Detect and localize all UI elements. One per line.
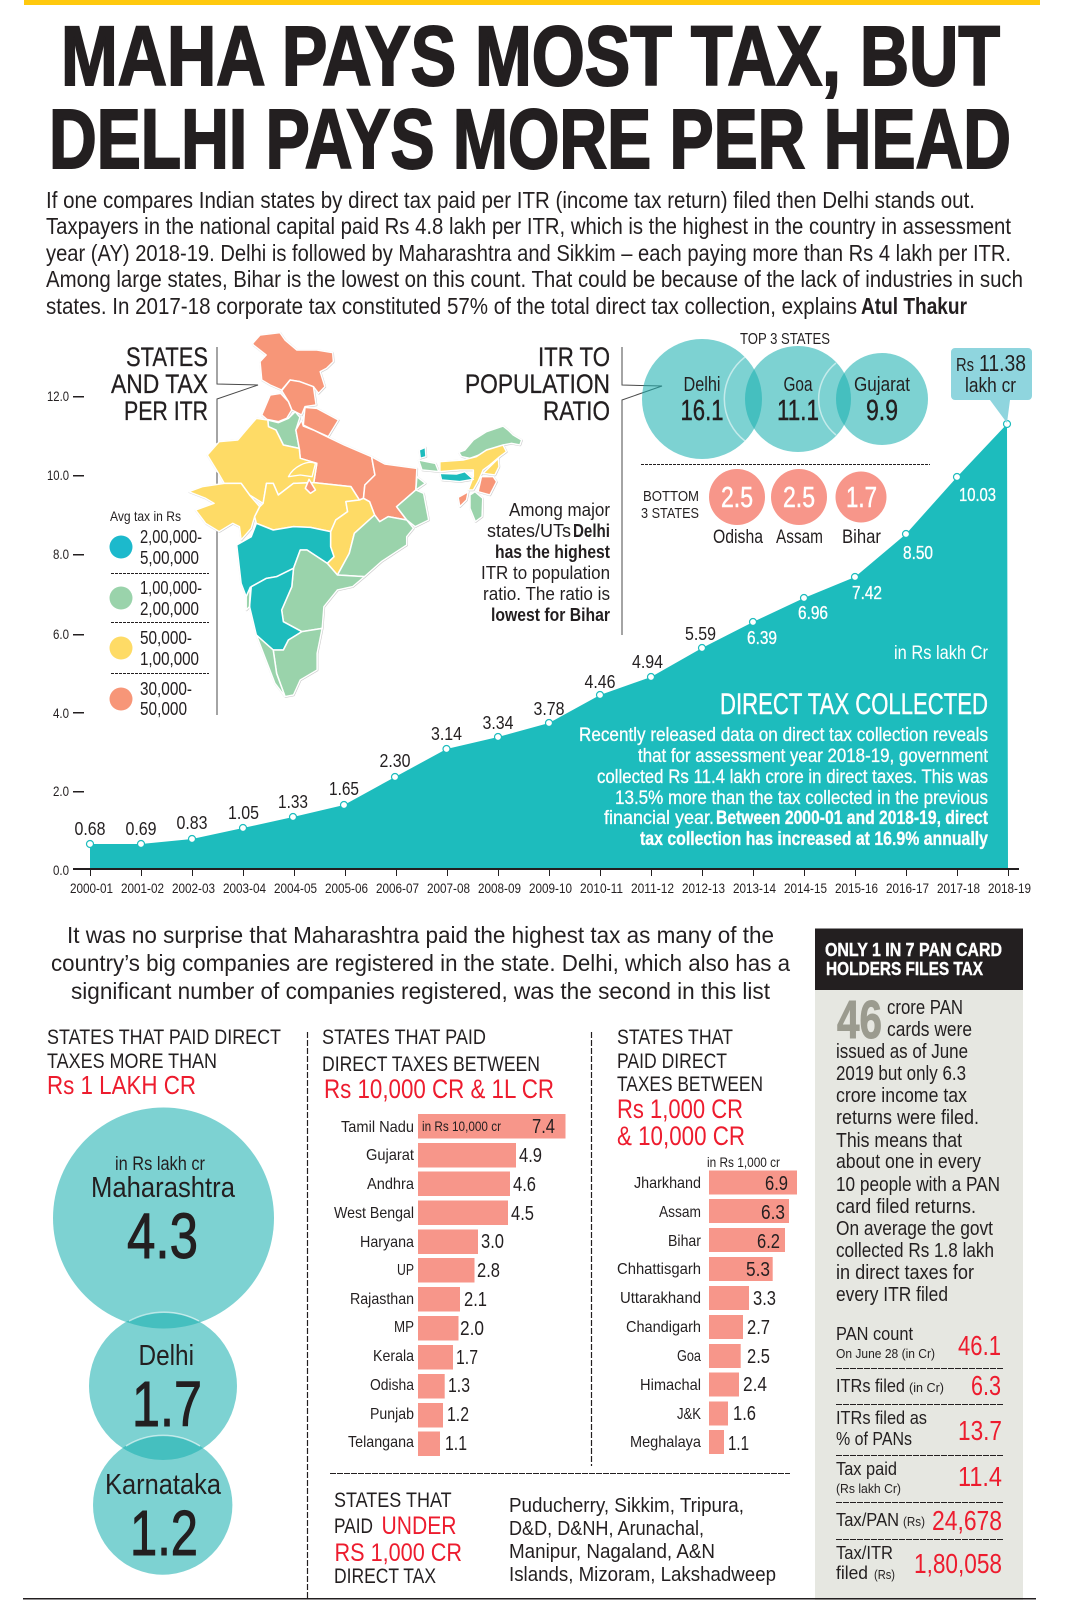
heading: 1000 cr to 10000 cr: & 10,000 CR bbox=[617, 1121, 745, 1151]
bottom 3 states circles: 2.5 bbox=[783, 482, 815, 514]
top 3 states circles: 11.1 bbox=[777, 395, 819, 427]
top 3 states circles: Delhi bbox=[684, 374, 720, 396]
x axis bbox=[70, 868, 1031, 896]
under 1000 cr block: PAID bbox=[334, 1515, 373, 1538]
x axis: 2008-09 bbox=[478, 880, 521, 896]
heading: 1000 cr to 10000 cr: STATES THAT bbox=[617, 1026, 733, 1049]
callout: Rs 11.38 lakh cr: lakh cr bbox=[965, 375, 1016, 397]
stats table: On June 28 (in Cr) bbox=[836, 1346, 935, 1361]
stats table: (Rs) bbox=[903, 1514, 925, 1529]
data value labels: 6.39 bbox=[747, 628, 777, 648]
bar chart: 10000 cr to 1 lakh cr: Andhra bbox=[367, 1176, 414, 1193]
bar chart: 1000 cr to 10000 cr: Uttarakhand bbox=[620, 1290, 701, 1307]
x axis: 2001-02 bbox=[121, 880, 164, 896]
ITR note: lowest for Bihar bbox=[491, 605, 610, 625]
ITR note: ratio. The ratio is bbox=[483, 584, 610, 604]
bar chart: 10000 cr to 1 lakh cr: 1.2 bbox=[447, 1404, 469, 1426]
bar chart: 1000 cr to 10000 cr: 5.3 bbox=[746, 1259, 770, 1281]
bar chart: 10000 cr to 1 lakh cr: Telangana bbox=[348, 1434, 414, 1451]
data point markers bbox=[86, 420, 1010, 848]
bar chart: 1000 cr to 10000 cr: 1.6 bbox=[733, 1403, 756, 1425]
intro text bbox=[46, 187, 1023, 319]
legend: avg tax: 1,00,000 bbox=[140, 649, 199, 669]
panel text: returns were filed. bbox=[836, 1107, 979, 1129]
legend: avg tax: Avg tax in Rs bbox=[110, 508, 181, 524]
bubble chart: top states bbox=[53, 1108, 274, 1575]
bar chart: 10000 cr to 1 lakh cr: 3.0 bbox=[481, 1231, 504, 1253]
panel heading: HOLDERS FILES TAX bbox=[826, 959, 983, 979]
direct tax text bbox=[579, 725, 989, 850]
x axis: 2002-03 bbox=[172, 880, 215, 896]
bar chart: 1000 cr to 10000 cr: Himachal bbox=[640, 1377, 701, 1394]
direct tax text: 13.5% more than the tax collected in the previous bbox=[615, 788, 988, 809]
under 1000 cr block: Puducherry, Sikkim, Tripura, bbox=[509, 1495, 744, 1517]
x axis: 2015-16 bbox=[835, 880, 878, 896]
heading: states and tax per ITR: STATES bbox=[126, 342, 208, 372]
unit label: in Rs lakh Cr bbox=[894, 643, 989, 664]
x axis: 2006-07 bbox=[376, 880, 419, 896]
bar chart: 1000 cr to 10000 cr: Bihar bbox=[668, 1233, 702, 1250]
heading: states and tax per ITR bbox=[111, 342, 208, 426]
bar chart: 10000 cr to 1 lakh cr: 1.3 bbox=[448, 1375, 470, 1397]
title bbox=[49, 9, 1011, 186]
under 1000 cr block: Manipur, Nagaland, A&N bbox=[509, 1541, 715, 1563]
bar chart: 10000 cr to 1 lakh cr: 1.1 bbox=[445, 1433, 467, 1455]
bar chart: 1000 cr to 10000 cr: Goa bbox=[677, 1348, 701, 1365]
stats table: 24,678 bbox=[932, 1505, 1002, 1536]
data value labels: 0.83 bbox=[176, 813, 208, 833]
bar chart: 10000 cr to 1 lakh cr: MP bbox=[394, 1319, 414, 1336]
data value labels: 4.46 bbox=[584, 672, 616, 692]
data value labels: 10.03 bbox=[959, 485, 996, 505]
y axis labels: 2.0 bbox=[53, 783, 69, 799]
panel text: in direct taxes for bbox=[836, 1262, 974, 1284]
bar chart: 1000 cr to 10000 cr: 6.9 bbox=[765, 1173, 788, 1195]
panel text: 2019 but only 6.3 bbox=[836, 1063, 966, 1085]
heading: 1000 cr to 10000 cr: PAID DIRECT bbox=[617, 1050, 727, 1073]
y axis labels: 0.0 bbox=[53, 862, 69, 878]
ITR note bbox=[481, 500, 610, 625]
intro text: Atul Thakur bbox=[861, 293, 967, 319]
data value labels: 1.65 bbox=[329, 779, 359, 799]
ITR note: ITR to population bbox=[481, 563, 610, 583]
data value labels: 5.59 bbox=[685, 624, 716, 644]
bar chart: 1000 cr to 10000 cr: 2.4 bbox=[743, 1374, 767, 1396]
x axis: 2010-11 bbox=[580, 880, 623, 896]
panel text: cards were bbox=[887, 1019, 972, 1041]
under 1000 cr block: DIRECT TAX bbox=[334, 1565, 436, 1588]
bar chart: 10000 cr to 1 lakh cr: 4.6 bbox=[513, 1174, 536, 1196]
bar chart: 1000 cr to 10000 cr: Chhattisgarh bbox=[617, 1261, 701, 1278]
heading: 10000 cr to 1 lakh cr: STATES THAT PAID bbox=[322, 1026, 486, 1049]
intro text: If one compares Indian states by direct tax paid per ITR (income tax return) filed then Delhi stands out. bbox=[46, 187, 975, 213]
stats table: Tax/PAN bbox=[836, 1510, 899, 1530]
x axis: 2017-18 bbox=[937, 880, 980, 896]
panel text: crore PAN bbox=[887, 997, 963, 1019]
bar chart: 1000 cr to 10000 cr: 1.1 bbox=[728, 1433, 749, 1455]
heading: ITR to population ratio: ITR TO bbox=[538, 342, 610, 372]
bubble chart: top states: 1.7 bbox=[132, 1368, 202, 1440]
stats table: ITRs filed bbox=[836, 1376, 905, 1396]
top 3 states circles: 16.1 bbox=[680, 395, 724, 427]
bubble chart: top states: in Rs lakh cr bbox=[115, 1154, 206, 1175]
bar chart: 10000 cr to 1 lakh cr: Gujarat bbox=[366, 1147, 415, 1164]
bubble chart: top states: 1.2 bbox=[130, 1497, 198, 1569]
data value labels: 4.94 bbox=[632, 652, 663, 672]
panel text: about one in every bbox=[836, 1151, 981, 1173]
legend: avg tax: 30,000- bbox=[140, 679, 192, 699]
bar chart: 1000 cr to 10000 cr: in Rs 1,000 cr bbox=[707, 1154, 780, 1170]
direct tax text: collected Rs 11.4 lakh crore in direct taxes. This was bbox=[597, 767, 988, 788]
y axis labels: 6.0 bbox=[53, 626, 69, 642]
heading: over 1 lakh cr: Rs 1 LAKH CR bbox=[47, 1070, 196, 1100]
top 3 states circles bbox=[642, 331, 928, 459]
stats table: 6.3 bbox=[971, 1370, 1001, 1401]
middle intro text: significant number of companies registered, was the second in this list bbox=[71, 978, 771, 1004]
bar chart: 1000 cr to 10000 cr: Assam bbox=[659, 1204, 701, 1221]
heading: ITR to population ratio: POPULATION bbox=[465, 369, 610, 399]
callout: Rs 11.38 lakh cr bbox=[951, 348, 1032, 423]
data value labels: 1.33 bbox=[278, 792, 308, 812]
area chart: direct tax collected bbox=[47, 388, 1031, 896]
legend: avg tax: 5,00,000 bbox=[140, 548, 199, 568]
bar chart: 1000 cr to 10000 cr: 2.7 bbox=[747, 1317, 770, 1339]
heading: ITR to population ratio bbox=[465, 342, 610, 426]
stats table: 46.1 bbox=[958, 1330, 1001, 1361]
heading: 1000 cr to 10000 cr: Rs 1,000 CR bbox=[617, 1094, 743, 1124]
bar chart: 10000 cr to 1 lakh cr: 1.7 bbox=[456, 1347, 478, 1369]
x axis: 2016-17 bbox=[886, 880, 929, 896]
ITR note: has the highest bbox=[495, 542, 610, 562]
bar chart: 10000 cr to 1 lakh cr: Rajasthan bbox=[350, 1291, 414, 1308]
under 1000 cr block: D&D, D&NH, Arunachal, bbox=[509, 1518, 704, 1540]
bottom 3 states circles: Bihar bbox=[842, 527, 882, 548]
ITR note: Delhi bbox=[573, 521, 610, 541]
bar chart: 1000 cr to 10000 cr: J&K bbox=[677, 1406, 701, 1423]
leader line: states and tax bbox=[217, 347, 258, 715]
under 1000 cr block: Islands, Mizoram, Lakshadweep bbox=[509, 1564, 776, 1586]
heading: ITR to population ratio: RATIO bbox=[543, 396, 610, 426]
direct tax text: financial year. bbox=[604, 808, 714, 829]
data value labels: 0.69 bbox=[126, 819, 156, 839]
panel text: collected Rs 1.8 lakh bbox=[836, 1240, 994, 1262]
stats table bbox=[836, 1324, 1003, 1583]
heading: over 1 lakh cr bbox=[47, 1026, 281, 1100]
panel heading bbox=[815, 928, 1023, 990]
data value labels: 7.42 bbox=[852, 583, 882, 603]
bar chart: 10000 cr to 1 lakh cr: West Bengal bbox=[334, 1205, 414, 1222]
heading: 1000 cr to 10000 cr bbox=[617, 1026, 763, 1151]
y axis labels: 8.0 bbox=[53, 546, 69, 562]
legend: avg tax: 2,00,000- bbox=[140, 527, 202, 547]
x axis: 2012-13 bbox=[682, 880, 725, 896]
bottom 3 states circles: BOTTOM bbox=[643, 488, 699, 505]
stats table: Tax/ITR bbox=[836, 1543, 893, 1563]
panel text bbox=[836, 997, 1000, 1306]
data value labels: 2.30 bbox=[380, 751, 410, 771]
callout: Rs 11.38 lakh cr: Rs bbox=[956, 355, 974, 375]
panel text: every ITR filed bbox=[836, 1284, 948, 1306]
stats table: (Rs lakh Cr) bbox=[836, 1481, 901, 1496]
heading: 10000 cr to 1 lakh cr: DIRECT TAXES BETWEEN bbox=[322, 1053, 540, 1076]
bar chart: 1000 cr to 10000 cr: 2.5 bbox=[747, 1346, 770, 1368]
leader line: ITR to population bbox=[622, 347, 662, 635]
ITR note: Among major bbox=[509, 500, 610, 520]
bar chart: 1000 cr to 10000 cr bbox=[617, 1154, 797, 1455]
bar chart: 10000 cr to 1 lakh cr: 2.8 bbox=[477, 1260, 500, 1282]
ITR note: states/UTs bbox=[487, 521, 571, 541]
heading: over 1 lakh cr: TAXES MORE THAN bbox=[47, 1050, 217, 1073]
top 3 states circles: Goa bbox=[784, 374, 813, 396]
callout: Rs 11.38 lakh cr: 11.38 bbox=[979, 350, 1026, 376]
legend: avg tax: 50,000- bbox=[140, 628, 192, 648]
panel text: On average the govt bbox=[836, 1218, 993, 1240]
panel heading: ONLY 1 IN 7 PAN CARD bbox=[825, 940, 1002, 960]
y axis labels: 12.0 bbox=[47, 388, 69, 404]
legend: avg tax: 1,00,000- bbox=[140, 578, 202, 598]
data value labels: 6.96 bbox=[798, 603, 828, 623]
bottom 3 states circles: Odisha bbox=[713, 527, 763, 548]
heading: 10000 cr to 1 lakh cr: Rs 10,000 CR & 1L CR bbox=[324, 1074, 554, 1104]
heading: 10000 cr to 1 lakh cr bbox=[322, 1026, 554, 1104]
bubble chart: top states: Karnataka bbox=[105, 1469, 222, 1501]
bottom 3 states circles bbox=[641, 469, 886, 548]
stats table: 1,80,058 bbox=[914, 1548, 1002, 1579]
data value labels bbox=[74, 485, 996, 839]
stats table: (in Cr) bbox=[909, 1380, 944, 1395]
x axis: 2004-05 bbox=[274, 880, 317, 896]
x axis: 2011-12 bbox=[631, 880, 674, 896]
middle intro text: It was no surprise that Maharashtra paid the highest tax as many of the bbox=[67, 922, 774, 948]
chart area bbox=[90, 424, 1008, 869]
bar chart: 10000 cr to 1 lakh cr: 4.5 bbox=[511, 1203, 534, 1225]
stats table: (Rs) bbox=[874, 1567, 895, 1582]
panel text: This means that bbox=[836, 1130, 962, 1152]
bar chart: 1000 cr to 10000 cr: 6.3 bbox=[761, 1202, 785, 1224]
under 1000 cr block: STATES THAT bbox=[334, 1489, 452, 1512]
bottom 3 states circles: 3 STATES bbox=[641, 505, 699, 522]
bar chart: 1000 cr to 10000 cr: 3.3 bbox=[753, 1288, 776, 1310]
bubble chart: top states: 4.3 bbox=[127, 1200, 198, 1272]
panel text: crore income tax bbox=[836, 1085, 967, 1107]
stats table: Tax paid bbox=[836, 1459, 897, 1479]
panel text: card filed returns. bbox=[836, 1196, 976, 1218]
direct tax text: tax collection has increased at 16.9% annually bbox=[640, 829, 988, 850]
bar chart: 10000 cr to 1 lakh cr bbox=[334, 1114, 566, 1456]
bar chart: 10000 cr to 1 lakh cr: Odisha bbox=[370, 1377, 414, 1394]
map of India bbox=[189, 333, 522, 697]
top 3 states circles: Gujarat bbox=[854, 374, 910, 396]
direct tax text: Between 2000-01 and 2018-19, direct bbox=[716, 808, 989, 829]
legend: avg tax: 50,000 bbox=[140, 699, 187, 719]
big number 46: 46 bbox=[837, 990, 882, 1050]
data value labels: 3.14 bbox=[431, 724, 462, 744]
stats table: PAN count bbox=[836, 1324, 913, 1344]
bar chart: 10000 cr to 1 lakh cr: UP bbox=[397, 1262, 414, 1279]
bar chart: 10000 cr to 1 lakh cr: 2.0 bbox=[460, 1318, 484, 1340]
data value labels: 3.34 bbox=[482, 713, 514, 733]
bar chart: 10000 cr to 1 lakh cr: 7.4 bbox=[532, 1116, 555, 1138]
top 3 states circles: 9.9 bbox=[866, 395, 898, 427]
panel text: issued as of June bbox=[836, 1041, 968, 1063]
bar chart: 10000 cr to 1 lakh cr: 2.1 bbox=[464, 1289, 487, 1311]
stats table: filed bbox=[836, 1563, 868, 1583]
under 1000 cr block bbox=[334, 1489, 776, 1588]
bottom 3 states circles: 1.7 bbox=[846, 482, 877, 514]
legend: avg tax bbox=[110, 508, 209, 719]
y axis labels bbox=[47, 388, 84, 878]
top 3 states circles: TOP 3 STATES bbox=[740, 331, 830, 348]
bar chart: 1000 cr to 10000 cr: Chandigarh bbox=[626, 1319, 701, 1336]
x axis: 2005-06 bbox=[325, 880, 368, 896]
bar chart: 1000 cr to 10000 cr: 6.2 bbox=[757, 1231, 780, 1253]
bottom 3 states circles: Assam bbox=[776, 527, 823, 548]
middle intro text bbox=[51, 922, 790, 1004]
stats table: 13.7 bbox=[958, 1415, 1002, 1446]
x axis: 2007-08 bbox=[427, 880, 470, 896]
data value labels: 0.68 bbox=[74, 819, 106, 839]
direct tax text: Recently released data on direct tax collection reveals bbox=[579, 725, 988, 746]
intro text: states. In 2017-18 corporate tax constituted 57% of the total direct tax collection, explains bbox=[46, 293, 857, 319]
panel: PAN card bbox=[815, 928, 1023, 1600]
stats table: ITRs filed as bbox=[836, 1408, 927, 1428]
middle intro text: country’s big companies are registered in the state. Delhi, which also has a bbox=[51, 950, 790, 976]
x axis: 2003-04 bbox=[223, 880, 266, 896]
heading: 1000 cr to 10000 cr: TAXES BETWEEN bbox=[617, 1073, 763, 1096]
bar chart: 10000 cr to 1 lakh cr: Kerala bbox=[373, 1348, 414, 1365]
bubble chart: top states: Maharashtra bbox=[91, 1172, 236, 1204]
data value labels: 3.78 bbox=[534, 699, 564, 719]
heading: over 1 lakh cr: STATES THAT PAID DIRECT bbox=[47, 1026, 281, 1049]
x axis: 2014-15 bbox=[784, 880, 827, 896]
bar chart: 10000 cr to 1 lakh cr: Tamil Nadu bbox=[341, 1119, 414, 1136]
y axis labels: 4.0 bbox=[53, 705, 69, 721]
data value labels: 1.05 bbox=[228, 803, 259, 823]
bar chart: 10000 cr to 1 lakh cr: 4.9 bbox=[519, 1145, 542, 1167]
x axis: 2009-10 bbox=[529, 880, 572, 896]
under 1000 cr block: UNDER bbox=[382, 1512, 456, 1540]
data value labels: 8.50 bbox=[903, 543, 933, 563]
stats table: % of PANs bbox=[836, 1429, 912, 1449]
x axis: 2000-01 bbox=[70, 880, 113, 896]
bar chart: 10000 cr to 1 lakh cr: Haryana bbox=[360, 1234, 414, 1251]
heading: states and tax per ITR: AND TAX bbox=[111, 369, 208, 399]
panel text: 10 people with a PAN bbox=[836, 1174, 1000, 1196]
direct tax text: that for assessment year 2018-19, government bbox=[638, 746, 989, 767]
legend: avg tax: 2,00,000 bbox=[140, 599, 199, 619]
y axis labels: 10.0 bbox=[47, 467, 69, 483]
heading: states and tax per ITR: PER ITR bbox=[124, 396, 208, 426]
under 1000 cr block: RS 1,000 CR bbox=[334, 1539, 462, 1567]
bubble chart: top states: Delhi bbox=[138, 1340, 194, 1372]
bar chart: 1000 cr to 10000 cr: Jharkhand bbox=[634, 1175, 701, 1192]
x axis: 2013-14 bbox=[733, 880, 776, 896]
bar chart: 10000 cr to 1 lakh cr: in Rs 10,000 cr bbox=[422, 1118, 501, 1134]
bottom 3 states circles: 2.5 bbox=[721, 482, 753, 514]
x axis: 2018-19 bbox=[988, 880, 1031, 896]
bar chart: 10000 cr to 1 lakh cr: Punjab bbox=[370, 1406, 414, 1423]
stats table: 11.4 bbox=[958, 1461, 1002, 1492]
bar chart: 1000 cr to 10000 cr: Meghalaya bbox=[630, 1434, 701, 1451]
